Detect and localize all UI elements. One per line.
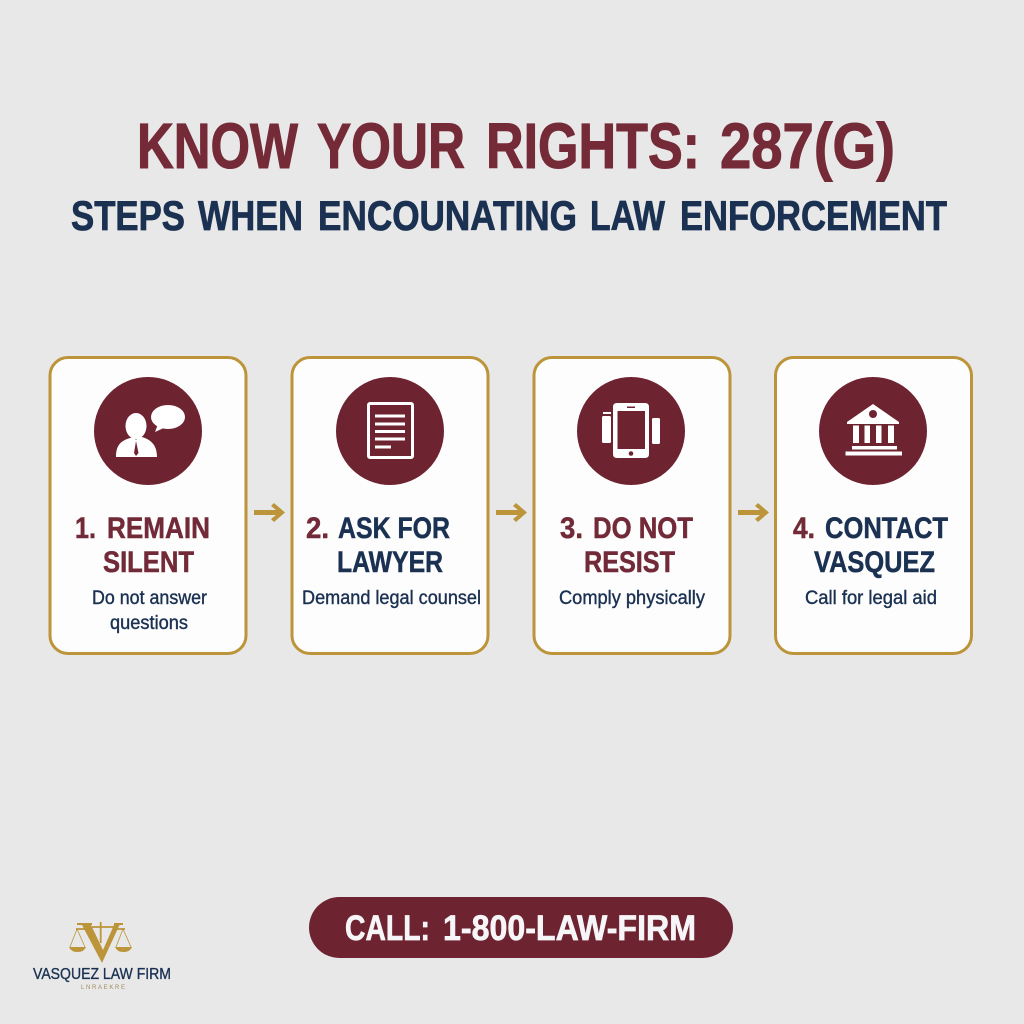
title: 287(G) <box>720 110 895 182</box>
step heading: 3. <box>560 512 583 545</box>
call button <box>309 897 733 958</box>
step heading: REMAIN <box>107 512 210 545</box>
subtitle: ENCOUNATING <box>318 192 577 239</box>
step heading: SILENT <box>103 546 194 579</box>
arrow 2 <box>496 503 527 522</box>
subtitle: ENFORCEMENT <box>680 192 947 239</box>
step description: Comply physically <box>559 587 705 609</box>
step description: questions <box>110 612 188 634</box>
title: KNOW <box>137 110 298 182</box>
step heading <box>306 512 450 579</box>
icon: document <box>336 377 444 485</box>
step heading: DO NOT <box>593 512 693 545</box>
subtitle <box>71 192 947 239</box>
step heading: VASQUEZ <box>814 546 935 579</box>
subtitle: WHEN <box>198 192 303 239</box>
step description: Do not answer <box>92 587 207 609</box>
step heading <box>560 512 693 579</box>
subtitle: LAW <box>590 192 665 239</box>
icon: phone <box>577 377 685 485</box>
logo: Vasquez Law Firm <box>33 922 171 991</box>
step heading: 4. <box>793 512 815 545</box>
arrow 3 <box>738 503 769 522</box>
step heading: 2. <box>306 512 329 545</box>
icon: V and scales <box>69 922 132 963</box>
panel: step 3 do not resist <box>534 358 730 654</box>
logo wordmark: VASQUEZ LAW FIRM <box>33 966 171 983</box>
panel: step 4 contact vasquez <box>776 358 972 654</box>
step heading <box>75 512 210 579</box>
logo tagline: LNRAEKRE <box>81 985 125 991</box>
step heading: RESIST <box>584 546 675 579</box>
step heading: 1. <box>75 512 96 545</box>
title: YOUR <box>317 110 465 182</box>
step description <box>92 587 207 634</box>
call button: 1-800-LAW-FIRM <box>443 909 696 948</box>
panel: step 2 ask for lawyer <box>292 358 488 654</box>
icon: courthouse <box>819 377 927 485</box>
call button: CALL: <box>345 909 430 948</box>
title: RIGHTS: <box>486 110 700 182</box>
panel: step 1 remain silent <box>50 358 246 654</box>
step heading: ASK FOR <box>338 512 450 545</box>
icon: person speaking <box>94 377 202 485</box>
subtitle: STEPS <box>71 192 185 239</box>
step heading: CONTACT <box>825 512 948 545</box>
arrow 1 <box>254 503 285 522</box>
step description: Demand legal counsel <box>302 587 481 609</box>
title <box>137 110 895 182</box>
step heading <box>793 512 948 579</box>
step description: Call for legal aid <box>805 587 937 609</box>
step heading: LAWYER <box>337 546 443 579</box>
